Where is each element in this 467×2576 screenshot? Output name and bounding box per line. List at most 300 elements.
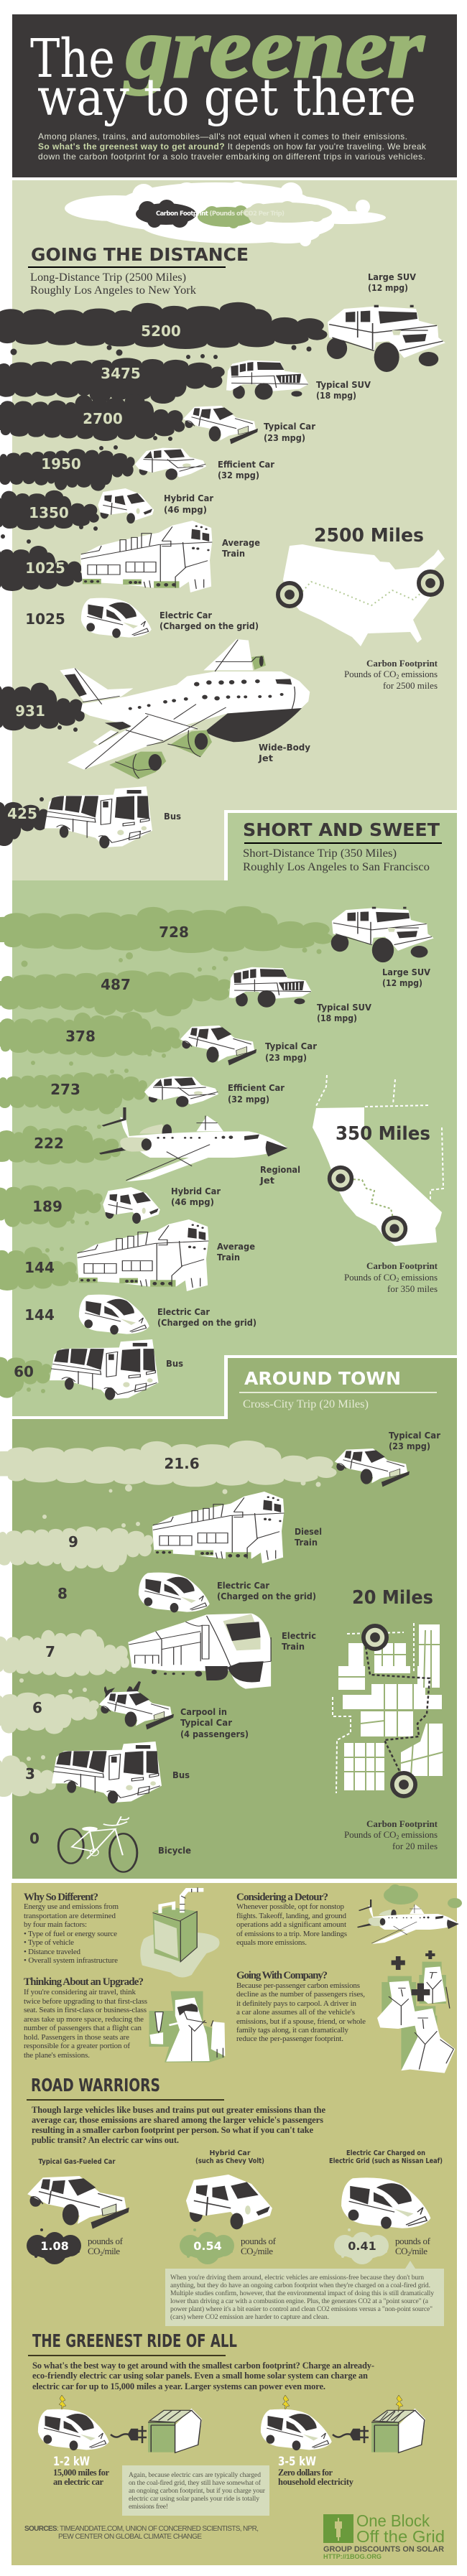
label: (Charged on the grid): [159, 621, 259, 631]
icon: hybrid car: [98, 488, 154, 524]
label: Typical Car: [265, 1041, 317, 1051]
number: 378: [65, 1028, 96, 1045]
row: regional jet 222: [0, 1107, 300, 1186]
label: Typical SUV: [317, 1003, 372, 1013]
title word: The: The: [30, 28, 115, 90]
text block: upgrade: number of passengers that a flight can: [24, 2024, 142, 2032]
label: [217, 1242, 255, 1263]
label: Bus: [166, 1359, 183, 1369]
subheading: [30, 271, 196, 297]
row: bus 425: [0, 786, 181, 848]
comparison: hybrid car: (such as Chevy Volt): [195, 2157, 264, 2165]
label: Bus: [172, 1770, 190, 1780]
number: 21.6: [164, 1455, 200, 1472]
label: Large SUV: [382, 967, 431, 977]
text block: company: family tags along, it can dramatically: [236, 2026, 349, 2035]
text block: road warriors intro: average car, those emissions are shared among the larger vehicle's passengers: [32, 2115, 323, 2125]
callout: electric vehicles note: power plant) where it's a bit easier to control and clean CO2 emissions versus a "non-point source": [170, 2305, 433, 2313]
number: 144: [24, 1306, 55, 1324]
text block: upgrade: twice before upgrading to that first-class: [24, 1997, 147, 2006]
icon: electric car: [139, 1573, 210, 1612]
callout: electric vehicles note: lower than driving a car with a combustion engine. Plus, the generates CO2 at a "point source" (a: [170, 2297, 429, 2305]
label: Carpool in: [180, 1707, 227, 1717]
number: 931: [15, 702, 45, 720]
row: electric car 1025: [25, 598, 259, 638]
icon: large SUV: [327, 305, 445, 372]
callout: solar note: electric car using solar panels your ride is totally: [129, 2495, 259, 2503]
text block: why so different: Energy use and emissions from: [24, 1902, 119, 1911]
text block: upgrade: [24, 1976, 147, 2060]
carbon footprint note: Pounds of CO: [344, 669, 397, 679]
carbon footprint note: emissions: [399, 669, 438, 679]
label: (23 mpg): [389, 1441, 430, 1451]
cloud value: 0.54: [193, 2239, 222, 2253]
callout: solar note: [122, 2465, 269, 2516]
label: [317, 1003, 372, 1023]
row: efficient car 1950: [0, 445, 274, 491]
label: [222, 538, 260, 559]
sources: [24, 2525, 259, 2541]
text block: why so different: Why So Different?: [24, 1892, 98, 1903]
text block: why so different: • Overall system infrastructure: [24, 1956, 118, 1965]
illustration: 3-5 kW car and house: [261, 2395, 425, 2487]
number: 0: [29, 1830, 40, 1847]
intro text: down the carbon footprint for a solo traveler embarking on different trips in various vehicles.: [38, 152, 425, 162]
callout: solar note: emissions free!: [129, 2503, 168, 2511]
icon: typical SUV: [226, 361, 309, 400]
illustration: 1-2 kW car and house: [38, 2395, 202, 2487]
text block: detour: Considering a Detour?: [236, 1892, 328, 1903]
row: bus 3: [0, 1742, 190, 1803]
text block: detour: flights. Takeoff, landing, and ground: [236, 1912, 346, 1920]
row: hybrid car 189: [0, 1185, 221, 1228]
icon: large SUV: [331, 907, 434, 962]
carbon footprint note: for 20 miles: [392, 1841, 438, 1851]
comparison: electric car: Electric Grid (such as Nissan Leaf): [329, 2157, 443, 2165]
label: Hybrid Car: [164, 493, 213, 503]
icon: bus: [45, 786, 152, 848]
number: 8: [57, 1585, 68, 1602]
row: electric car 8: [57, 1573, 316, 1612]
label: [389, 1431, 440, 1451]
label: Regional: [260, 1165, 300, 1175]
number: 1025: [25, 559, 65, 577]
comparison: electric car: [329, 2149, 443, 2264]
carbon footprint note: Carbon Footprint: [366, 1260, 438, 1271]
carbon footprint note: for 350 miles: [387, 1283, 438, 1294]
unit: /mile: [102, 2246, 120, 2256]
comparison: electric car: Electric Car Charged on: [346, 2149, 425, 2157]
logo: One Block Off the Grid: One Block: [356, 2511, 430, 2530]
carbon footprint note: 2: [396, 1834, 399, 1841]
map title: 350 Miles: [336, 1123, 430, 1145]
unit: [395, 2236, 431, 2257]
label: [265, 1041, 317, 1063]
icon: train: [80, 521, 212, 592]
heading: short and sweet: SHORT AND SWEET: [243, 819, 440, 840]
heading: the greenest ride of all: THE GREENEST RIDE OF ALL: [32, 2330, 237, 2351]
map title: 2500 Miles: [314, 525, 424, 547]
icon: regional jet: [99, 1107, 288, 1181]
caption: an electric car: [53, 2477, 103, 2487]
text block: why so different: transportation are determined: [24, 1912, 116, 1920]
icon: efficient car: [144, 1077, 218, 1107]
cloud value: 1.08: [40, 2239, 69, 2253]
sources: SOURCES: TIMEANDDATE.COM, UNION OF CONCERNED SCIENTISTS, NPR,: [24, 2525, 259, 2533]
text block: greenest ride intro: electric car for up to 15,000 miles a year. Larger systems can power even more.: [32, 2381, 325, 2391]
unit: [241, 2236, 277, 2257]
subheading: Short-Distance Trip (350 Miles): [243, 847, 397, 860]
cloud value: [27, 2228, 81, 2264]
subheading: Cross-City Trip (20 Miles): [243, 1398, 369, 1410]
label: [217, 1581, 316, 1601]
text block: why so different: by four main factors:: [24, 1920, 87, 1929]
label: (Charged on the grid): [217, 1591, 316, 1601]
row: electric train 7: [0, 1614, 316, 1689]
label: [382, 967, 431, 988]
panel: around town: [0, 1355, 457, 1879]
carbon footprint note: [344, 1260, 438, 1294]
label: [259, 1165, 300, 1186]
legend cloud: Carbon Footprint (Pounds of CO2 Per Trip): [156, 210, 285, 218]
comparison: typical gas-fueled car: Typical Gas-Fueled Car: [39, 2158, 116, 2166]
icon: typical car: [335, 1449, 410, 1487]
unit: /mile: [410, 2246, 427, 2256]
label: Large SUV: [368, 272, 417, 282]
panel: going the distance: [0, 180, 457, 880]
callout: electric vehicles note: anything, but they do have an ongoing carbon footprint when they're charged on a coal-fired grid.: [170, 2282, 430, 2289]
label: Typical Car: [264, 422, 315, 432]
label: Average: [222, 538, 260, 548]
comparison: hybrid car: Hybrid Car: [209, 2149, 251, 2157]
icon: hybrid car: [103, 1187, 160, 1224]
label: Electric Car: [157, 1307, 210, 1317]
text block: greenest ride intro: [32, 2361, 374, 2391]
icon: carpool people: [377, 1950, 455, 2073]
unit: pounds of: [88, 2236, 124, 2246]
legend cloud: [65, 182, 386, 246]
icon: typical car: [180, 1026, 256, 1065]
caption: Zero dollars for: [278, 2468, 333, 2478]
number: 487: [101, 976, 131, 993]
callout: solar note: on the coal-fired grid, they still have somewhat of: [129, 2479, 262, 2487]
label: Electric Car: [159, 610, 212, 620]
icon: electric car: [79, 1295, 149, 1334]
unit: CO: [241, 2246, 254, 2256]
cloud value: [180, 2228, 234, 2264]
icon: typical SUV: [229, 967, 312, 1008]
unit: 2: [407, 2251, 410, 2257]
number: 9: [68, 1533, 78, 1550]
map: 2500 miles: [278, 525, 445, 646]
label: Efficient Car: [228, 1083, 285, 1093]
icon: efficient car: [135, 448, 206, 480]
carbon footprint note: emissions: [399, 1829, 438, 1840]
text block: upgrade: If you're considering air travel, think: [24, 1988, 137, 1996]
text block: road warriors intro: Though large vehicles like buses and trains put out greater emissions than the: [32, 2105, 325, 2115]
title word: greener: greener: [124, 0, 425, 96]
label: [282, 1631, 316, 1652]
text block: why so different: • Type of vehicle: [24, 1938, 74, 1947]
number: 6: [32, 1699, 42, 1716]
text block: road warriors intro: resulting in a smaller carbon footprint per person. So what if you can't take: [32, 2125, 313, 2135]
row: large SUV 728: [0, 906, 434, 988]
panel: tips, road warriors and greenest ride: [11, 1883, 462, 2565]
intro text: So what's the greenest way to get around? It depends on how far you're traveling. We break: [38, 141, 427, 152]
label: [180, 1707, 249, 1739]
text block: why so different: • Distance traveled: [24, 1948, 80, 1956]
row: efficient car 273: [0, 1069, 285, 1115]
label: (Charged on the grid): [157, 1318, 256, 1328]
text block: greenest ride intro: eco-friendly electric car using solar panels. Even a small home solar system can charge an: [32, 2371, 368, 2381]
label: [264, 422, 315, 443]
icon: electric train: [128, 1614, 271, 1689]
carbon footprint note: [344, 1818, 438, 1851]
callout: solar note: an ongoing carbon footprint, but if you charge your: [129, 2487, 266, 2495]
text block: upgrade: hold. Passengers in those seats are: [24, 2033, 129, 2042]
logo: One Block Off the Grid: GROUP DISCOUNTS ON SOLAR: [323, 2545, 444, 2554]
unit: pounds of: [395, 2236, 431, 2246]
map: 350 miles: [313, 1075, 443, 1246]
text block: company: a car alone assumes all of the vehicle's: [236, 2008, 355, 2017]
label: [316, 380, 371, 401]
text block: detour: operations add a significant amount: [236, 1920, 346, 1929]
text block: detour: equals more emissions.: [236, 1938, 307, 1947]
caption: household electricity: [278, 2477, 354, 2487]
label: [228, 1083, 285, 1105]
unit: 2: [100, 2251, 103, 2257]
label: [295, 1527, 322, 1548]
icon: first-class passenger: [149, 1991, 225, 2063]
panel: short and sweet: [0, 810, 457, 1416]
title line: way to get there: way to get there: [37, 68, 416, 127]
text block: company: [236, 1970, 366, 2043]
text block: company: reduce the per-passenger footprint.: [236, 2035, 343, 2043]
label: [368, 272, 417, 293]
label: Bus: [164, 812, 181, 822]
text block: company: decline as the number of passengers rises,: [236, 1990, 365, 1999]
text block: upgrade: Thinking About an Upgrade?: [24, 1976, 144, 1988]
logo: One Block Off the Grid: HTTP://1BOG.ORG: [323, 2553, 382, 2560]
number: 273: [50, 1081, 80, 1098]
label: Typical Car: [180, 1718, 232, 1728]
icon: diesel train: [152, 1492, 284, 1563]
subheading: Long-Distance Trip (2500 Miles): [30, 271, 186, 284]
carbon footprint note: 2: [396, 1277, 399, 1283]
callout: solar note: Again, because electric cars are typically charged: [129, 2471, 261, 2479]
heading: road warriors: ROAD WARRIORS: [31, 2075, 160, 2096]
number: 7: [45, 1643, 55, 1660]
text block: upgrade: seat. Seats in first-class or business-class: [24, 2006, 147, 2014]
carbon footprint note: Pounds of CO: [344, 1272, 397, 1283]
text block: why so different: • Type of fuel or energy source: [24, 1930, 117, 1938]
callout: electric vehicles note: (cars) where CO2 emission are harder to capture and clean.: [170, 2313, 329, 2321]
row: typical car 21.6: [0, 1431, 440, 1494]
unit: 2: [253, 2251, 256, 2257]
label: Bicycle: [158, 1846, 191, 1856]
label: Train: [222, 549, 245, 559]
text block: detour: [236, 1892, 347, 1947]
text block: company: Going With Company?: [236, 1970, 328, 1981]
row: typical SUV 3475: [0, 349, 371, 404]
row: wide-body jet 931: [0, 639, 310, 779]
label: [157, 1307, 256, 1328]
comparison: hybrid car: [180, 2149, 277, 2264]
icon: small plane with smoke: [357, 1884, 462, 1944]
intro text: [38, 131, 427, 162]
row: large SUV 5200: [0, 272, 445, 372]
panel: header: [12, 0, 457, 177]
sources: PEW CENTER ON GLOBAL CLIMATE CHANGE: [58, 2533, 202, 2541]
label: Wide-Body: [259, 743, 310, 753]
label: Hybrid Car: [171, 1186, 221, 1196]
text block: detour: of emissions to a trip. More landings: [236, 1930, 347, 1938]
callout: electric vehicles note: Multiple studies confirm, however, that the environmental impact of doing this is still dramatically: [170, 2289, 434, 2297]
number: 425: [7, 805, 37, 822]
label: (12 mpg): [368, 283, 408, 293]
carbon footprint note: 2: [396, 674, 399, 680]
icon: typical car: [183, 406, 258, 444]
label: Typical Car: [389, 1431, 440, 1441]
row: average train 1025: [0, 521, 260, 592]
caption: [53, 2455, 109, 2487]
row: carpool 6: [0, 1681, 249, 1739]
text block: upgrade: areas take up more space, reducing the: [24, 2015, 144, 2024]
number: 3475: [101, 365, 141, 382]
icon: bicycle: [58, 1816, 137, 1872]
unit: CO: [395, 2246, 408, 2256]
icon: bus: [52, 1742, 162, 1803]
text block: company: emissions, but if a spouse, friend, or whole: [236, 2017, 366, 2026]
row: electric car 144: [24, 1295, 256, 1334]
label: (23 mpg): [264, 433, 305, 443]
icon: juice box: [140, 1887, 220, 1977]
carbon footprint note: Carbon Footprint: [366, 1818, 438, 1829]
unit: /mile: [255, 2246, 273, 2256]
number: 60: [14, 1363, 34, 1380]
row: typical car 378: [0, 1012, 317, 1066]
label: (12 mpg): [382, 978, 422, 988]
carbon footprint note: emissions: [399, 1272, 438, 1283]
number: 144: [24, 1259, 55, 1276]
label: [218, 460, 274, 480]
row: typical SUV 487: [0, 966, 372, 1023]
row: bicycle 0: [29, 1816, 191, 1872]
intro text: Among planes, trains, and automobiles—all's not equal when it comes to their emissions.: [38, 131, 407, 141]
label: Efficient Car: [218, 460, 274, 470]
carbon footprint note: Carbon Footprint: [366, 658, 438, 669]
heading: around town: AROUND TOWN: [244, 1368, 401, 1389]
number: 189: [32, 1198, 63, 1215]
logo: One Block Off the Grid: [323, 2511, 445, 2560]
caption: 3-5 kW: [278, 2455, 316, 2469]
label: [159, 610, 259, 631]
callout: electric vehicles note: [165, 2261, 444, 2326]
subheading: Roughly Los Angeles to New York: [30, 284, 196, 297]
map title: 20 Miles: [352, 1587, 433, 1609]
map: 20 miles: [333, 1587, 443, 1796]
number: 1950: [41, 455, 81, 473]
caption: [278, 2455, 354, 2487]
number: 728: [159, 924, 189, 941]
label: (18 mpg): [317, 1013, 357, 1023]
row: typical car 2700: [0, 394, 315, 444]
icon: bus: [50, 1339, 159, 1400]
label: Jet: [258, 753, 273, 763]
text block: why so different: [24, 1892, 119, 1965]
label: Train: [295, 1538, 318, 1548]
number: 1025: [25, 610, 65, 628]
label: (23 mpg): [265, 1053, 307, 1063]
number: 5200: [141, 322, 181, 340]
subheading: [243, 847, 430, 873]
icon: electric car: [81, 598, 152, 638]
text block: road warriors intro: public transit? An electric car wins out.: [32, 2135, 179, 2145]
label: [171, 1186, 221, 1207]
label: [164, 493, 213, 515]
heading: going the distance: GOING THE DISTANCE: [31, 244, 249, 265]
label: (18 mpg): [316, 391, 356, 401]
row: hybrid car 1350: [0, 488, 213, 544]
unit: pounds of: [241, 2236, 277, 2246]
label: (46 mpg): [171, 1197, 214, 1207]
text block: company: Because per-passenger carbon emissions: [236, 1981, 360, 1990]
carbon footprint note: [344, 658, 438, 691]
label: [258, 743, 310, 763]
carbon footprint note: for 2500 miles: [383, 680, 438, 691]
cloud value: 0.41: [348, 2239, 376, 2253]
caption: 15,000 miles for: [53, 2468, 109, 2478]
number: 1350: [29, 504, 69, 521]
label: (4 passengers): [180, 1729, 249, 1739]
label: Diesel: [295, 1527, 322, 1537]
label: (32 mpg): [218, 470, 259, 480]
number: 2700: [83, 410, 123, 427]
row: diesel train 9: [0, 1492, 322, 1572]
cloud value: [334, 2228, 389, 2264]
number: 222: [34, 1135, 64, 1152]
text block: detour: Whenever possible, opt for nonstop: [236, 1902, 345, 1911]
text block: upgrade: responsible for a greater portion of: [24, 2042, 130, 2050]
subheading: Roughly Los Angeles to San Francisco: [243, 861, 430, 873]
unit: [88, 2236, 124, 2257]
icon: carpool car with passengers: [99, 1681, 174, 1729]
caption: 1-2 kW: [53, 2455, 90, 2469]
label: Average: [217, 1242, 255, 1252]
comparison: typical gas-fueled car: [27, 2158, 129, 2264]
number: 3: [25, 1765, 35, 1782]
label: Typical SUV: [316, 380, 371, 390]
text block: road warriors intro: [32, 2105, 325, 2145]
unit: CO: [88, 2246, 101, 2256]
callout: electric vehicles note: When you're driving them around, electric vehicles are emissions-free because they don't burn: [170, 2274, 424, 2282]
label: Jet: [259, 1176, 274, 1186]
logo: One Block Off the Grid: Off the Grid: [356, 2527, 445, 2546]
icon: wide-body jet: [60, 639, 310, 779]
label: Train: [217, 1252, 240, 1263]
label: (32 mpg): [228, 1094, 269, 1105]
row: average train 144: [0, 1219, 255, 1291]
carbon footprint note: Pounds of CO: [344, 1829, 397, 1840]
label: Electric Car: [217, 1581, 269, 1591]
label: Train: [282, 1642, 305, 1652]
icon: train: [77, 1219, 208, 1291]
label: (46 mpg): [164, 505, 207, 515]
text block: upgrade: the plane's emissions.: [24, 2051, 90, 2060]
text block: greenest ride intro: So what's the best way to get around with the smallest carbon footprint? Charge an already-: [32, 2361, 374, 2371]
label: Electric: [282, 1631, 316, 1641]
text block: company: it definitely pays to carpool. A driver in: [236, 1999, 356, 2008]
